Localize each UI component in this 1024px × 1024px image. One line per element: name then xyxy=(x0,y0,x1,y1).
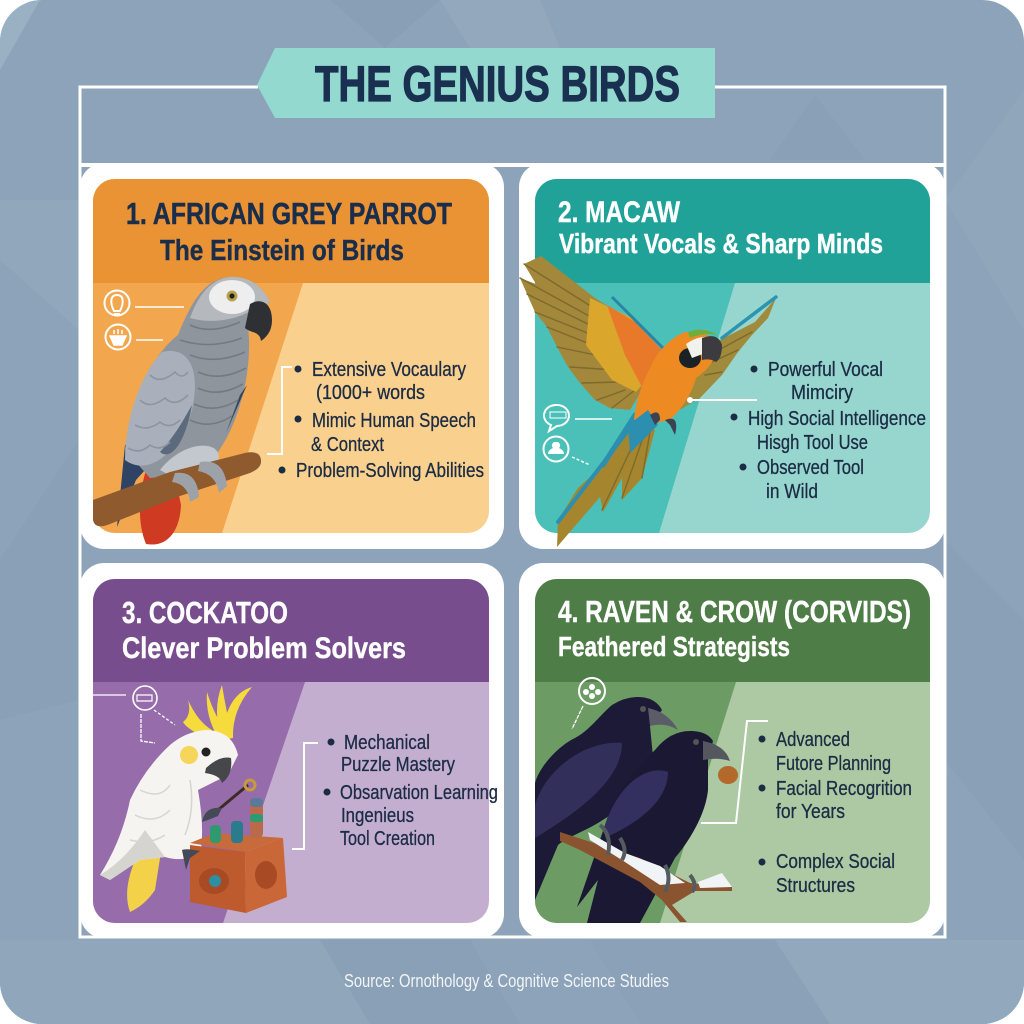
text block: traits: in Wild xyxy=(766,481,818,503)
text block: traits: for Years xyxy=(776,801,845,823)
text block: traits xyxy=(758,729,912,897)
arrow: speech pointer xyxy=(575,418,612,420)
text block: traits: Tool Creation xyxy=(340,828,435,850)
text block: traits: Mimciry xyxy=(791,382,853,404)
text block: traits xyxy=(278,359,484,482)
panel: Cockatoo xyxy=(80,563,504,938)
connector bracket xyxy=(701,721,768,823)
heading: Macaw: 2. MACAW xyxy=(558,196,681,229)
text block: traits: Mimic Human Speech xyxy=(312,410,476,432)
heading: Cockatoo: Clever Problem Solvers xyxy=(122,632,406,665)
icon: network xyxy=(579,678,605,704)
heading: Cockatoo xyxy=(122,595,406,665)
heading: African Grey Parrot: The Einstein of Birds xyxy=(160,235,404,267)
text block: traits xyxy=(730,359,926,503)
source footer: Source: Ornothology & Cognitive Science Studies xyxy=(344,971,669,991)
text block: traits: Puzzle Mastery xyxy=(341,754,455,776)
icon: brain xyxy=(106,324,130,350)
text block: traits: Mechanical xyxy=(344,732,430,754)
icon: person xyxy=(544,436,568,462)
text block: traits: Structures xyxy=(776,875,855,897)
text block: traits: Facial Recogrition xyxy=(776,778,912,800)
connector bracket xyxy=(267,367,292,454)
heading: Cockatoo: 3. COCKATOO xyxy=(122,595,288,630)
text block: traits: Futore Planning xyxy=(776,753,891,775)
text block: traits: Ingenieus xyxy=(341,805,414,827)
panel: Raven and Crow xyxy=(519,563,945,938)
heading: African Grey Parrot: 1. AFRICAN GREY PARROT xyxy=(126,196,452,231)
title: THE GENIUS BIRDS xyxy=(315,56,680,112)
pointer lines xyxy=(93,695,175,743)
arrow: bulb pointer xyxy=(135,306,184,308)
panel: Macaw xyxy=(519,163,945,549)
text block: traits: (1000+ words xyxy=(316,382,425,404)
icon: puzzle xyxy=(133,686,157,710)
text block: traits: Advanced xyxy=(776,729,850,751)
text block: traits: Powerful Vocal xyxy=(768,359,883,381)
text block: traits: & Context xyxy=(311,434,384,456)
text block: traits: Observed Tool xyxy=(757,457,864,479)
text block: traits: High Social Intelligence xyxy=(748,408,926,430)
illustration: cockatoo with puzzle box xyxy=(100,685,287,913)
arrow: brain pointer xyxy=(136,339,163,341)
heading: Raven and Crow: Feathered Strategists xyxy=(558,631,790,662)
illustration: ravens on branch xyxy=(535,697,738,923)
text block: traits: Hisgh Tool Use xyxy=(757,432,868,454)
pointer line xyxy=(572,706,583,729)
heading: Macaw: Vibrant Vocals & Sharp Minds xyxy=(559,228,883,259)
icon: light bulb xyxy=(104,290,130,316)
illustration: parrot xyxy=(93,277,272,545)
text block: traits: Problem-Solving Abilities xyxy=(296,460,484,482)
heading: African Grey Parrot xyxy=(126,196,452,267)
icon: speech bubble xyxy=(544,405,569,431)
heading: Raven and Crow xyxy=(558,594,911,662)
arrow: person pointer xyxy=(572,457,590,465)
illustration: macaw xyxy=(520,256,776,547)
heading: Macaw xyxy=(558,196,883,259)
text block: traits xyxy=(324,732,498,850)
text block: traits: Obsarvation Learning xyxy=(340,782,498,804)
connector line xyxy=(687,397,757,403)
text block: traits: Complex Social xyxy=(776,851,895,873)
panel: African Grey Parrot xyxy=(80,163,504,549)
connector bracket xyxy=(292,743,318,849)
heading: Raven and Crow: 4. RAVEN & CROW (CORVIDS) xyxy=(558,594,911,629)
top band xyxy=(79,163,945,167)
text block: traits: Extensive Vocaulary xyxy=(312,359,466,381)
frame outline xyxy=(80,87,945,937)
title banner xyxy=(257,48,715,118)
